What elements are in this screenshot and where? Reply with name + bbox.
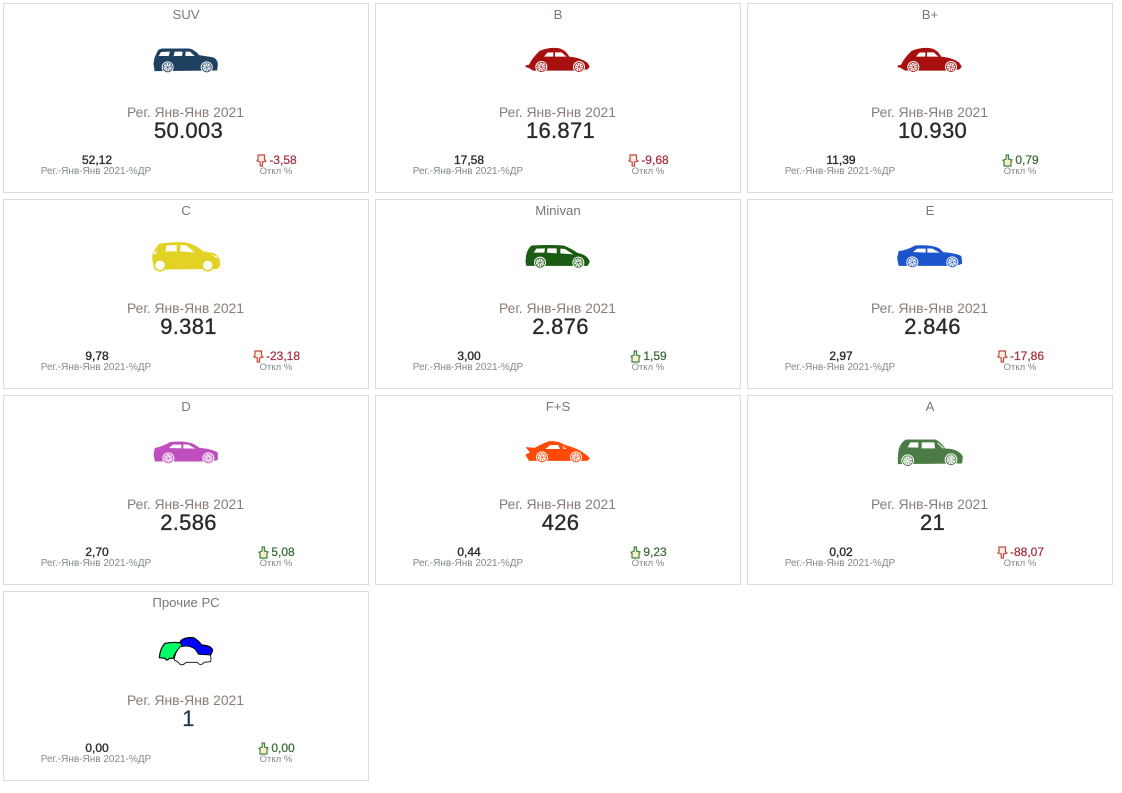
metric: deviation: -88,07 [1010,545,1044,559]
metric: deviation: 0,79 [1015,153,1039,167]
icon: D car [154,442,218,464]
label: period: Рег. Янв-Янв 2021 [499,300,616,316]
metric: deviation [997,545,1044,569]
heading: B+: B+ [922,7,938,22]
metric: share: Рег.-Янв-Янв 2021-%ДР [413,166,523,177]
card: E [747,199,1113,389]
metric: share [413,545,523,569]
metric: share [413,153,523,177]
card: F+S [375,395,741,585]
metric: deviation: Откл % [632,362,664,373]
metric: share [41,349,151,373]
metric: share: 52,12 [82,153,112,167]
heading: D: D [181,399,191,414]
metric: deviation: 0,00 [271,741,295,755]
value: registrations: 2.586 [160,510,217,535]
icon: C car [152,242,220,272]
card: D [3,395,369,585]
value: registrations: 50.003 [154,118,223,143]
metric: deviation: -9,68 [641,153,669,167]
label: period: Рег. Янв-Янв 2021 [127,300,244,316]
value: registrations: 10.930 [898,118,967,143]
label: period: Рег. Янв-Янв 2021 [871,104,988,120]
metric: share: 3,00 [457,349,481,363]
metric: deviation: Откл % [1004,362,1036,373]
metric: share: 9,78 [85,349,109,363]
value: registrations: 21 [920,510,945,535]
label: period: Рег. Янв-Янв 2021 [127,496,244,512]
metric: share: 0,02 [829,545,853,559]
metric: deviation: Откл % [260,558,292,569]
label: period: Рег. Янв-Янв 2021 [127,104,244,120]
metric: deviation: Откл % [632,166,664,177]
metric: share: Рег.-Янв-Янв 2021-%ДР [785,558,895,569]
metric: deviation [630,545,667,569]
label: period: Рег. Янв-Янв 2021 [499,104,616,120]
icon: B car [526,48,590,72]
value: registrations: 16.871 [526,118,595,143]
metric: deviation: Откл % [1004,558,1036,569]
metric: deviation: 1,59 [643,349,667,363]
heading: C: C [181,203,191,218]
card: B+ [747,3,1113,193]
metric: deviation: 9,23 [643,545,667,559]
metric: deviation [253,349,300,373]
metric: deviation: Откл % [1004,166,1036,177]
metric: share: Рег.-Янв-Янв 2021-%ДР [413,362,523,373]
metric: deviation: Откл % [260,754,292,765]
metric: share: 2,97 [829,349,853,363]
metric: deviation: Откл % [260,166,292,177]
heading: SUV: SUV [172,7,200,22]
label: period: Рег. Янв-Янв 2021 [499,496,616,512]
metric: deviation [258,741,295,765]
label: period: Рег. Янв-Янв 2021 [871,496,988,512]
heading: E: E [926,203,934,218]
heading: B: B [554,7,562,22]
metric: share: 0,00 [85,741,109,755]
value: registrations: 2.846 [904,314,961,339]
metric: share: Рег.-Янв-Янв 2021-%ДР [41,754,151,765]
label: period: Рег. Янв-Янв 2021 [871,300,988,316]
metric: deviation [256,153,297,177]
value: registrations: 2.876 [532,314,589,339]
metric: share [41,153,151,177]
metric: share [413,349,523,373]
label: period: Рег. Янв-Янв 2021 [127,692,244,708]
heading: Minivan: Minivan [535,203,581,218]
icon: F+S car [526,441,590,462]
metric: share: 0,44 [457,545,481,559]
metric: deviation [997,349,1044,373]
metric: deviation: Откл % [260,362,292,373]
metric: share [785,153,895,177]
card: C [3,199,369,389]
metric: share: 17,58 [454,153,484,167]
metric: deviation: -23,18 [266,349,300,363]
card: Minivan [375,199,741,389]
metric: deviation: -3,58 [269,153,297,167]
metric: share: Рег.-Янв-Янв 2021-%ДР [785,362,895,373]
metric: deviation [258,545,295,569]
icon: E car [897,245,962,268]
metric: deviation: Откл % [632,558,664,569]
metric: share: Рег.-Янв-Янв 2021-%ДР [785,166,895,177]
value: registrations: 1 [182,706,195,731]
icon: A car [898,440,963,466]
metric: deviation: 5,08 [271,545,295,559]
icon: other cars group [158,637,214,666]
value: registrations: 426 [542,510,579,535]
value: registrations: 9.381 [160,314,217,339]
metric: share: Рег.-Янв-Янв 2021-%ДР [41,558,151,569]
card: Прочие РС [3,591,369,781]
metric: deviation: -17,86 [1010,349,1044,363]
metric: share: Рег.-Янв-Янв 2021-%ДР [413,558,523,569]
heading: Прочие РС: Прочие РС [152,595,220,610]
icon: B+ car [898,48,962,72]
metric: share [41,741,151,765]
metric: deviation [628,153,669,177]
icon: SUV car [154,48,218,72]
metric: share [785,349,895,373]
card: SUV [3,3,369,193]
heading: F+S: F+S [546,399,570,414]
metric: share: 2,70 [85,545,109,559]
icon: Minivan car [526,245,590,268]
metric: share [41,545,151,569]
heading: A: A [926,399,934,414]
metric: share: 11,39 [826,153,856,167]
metric: share: Рег.-Янв-Янв 2021-%ДР [41,166,151,177]
metric: deviation [630,349,667,373]
card: A [747,395,1113,585]
metric: deviation [1002,153,1039,177]
metric: share [785,545,895,569]
card: B [375,3,741,193]
metric: share: Рег.-Янв-Янв 2021-%ДР [41,362,151,373]
